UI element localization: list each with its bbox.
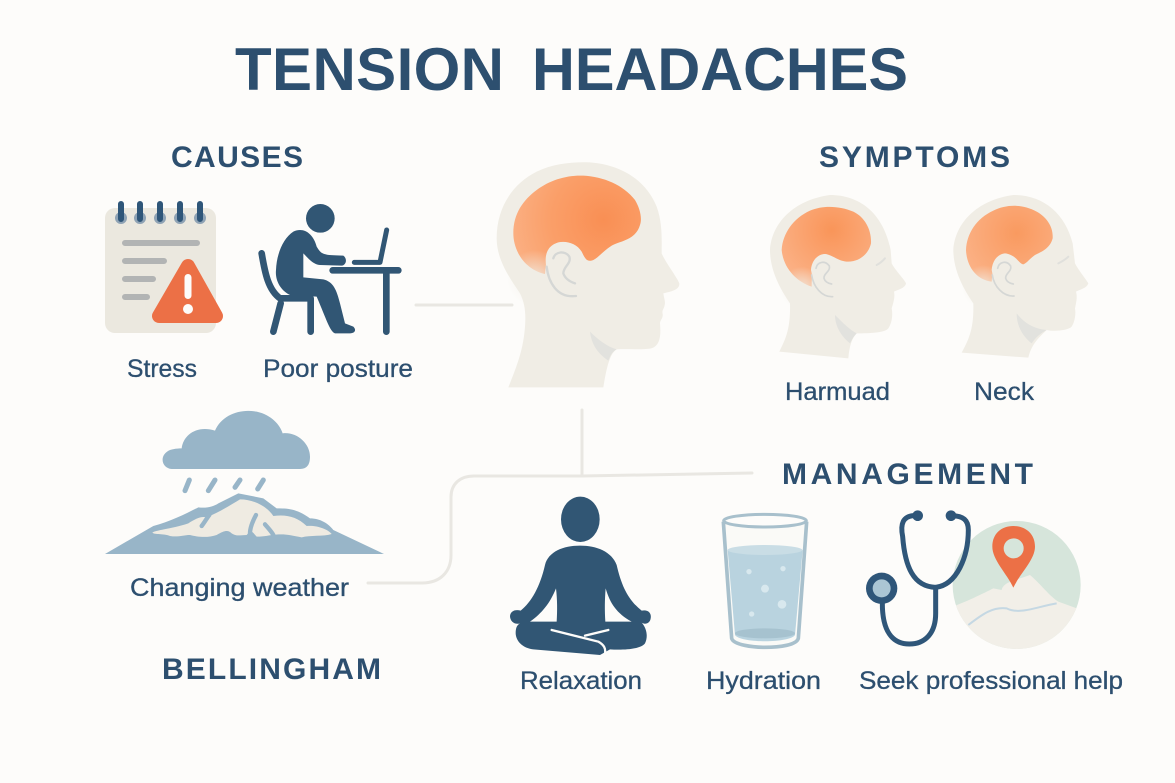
symptom head: neck	[953, 195, 1088, 358]
icon: stress calendar with warning	[105, 204, 216, 333]
title: HEADACHES	[532, 36, 908, 103]
heading: symptoms: SYMPTOMS	[819, 141, 1010, 174]
central head illustration	[497, 162, 679, 387]
connector lines	[368, 305, 752, 583]
symptom head: harmuad	[770, 195, 906, 358]
label: seek professional help: Seek professional help	[859, 667, 1123, 695]
label: relaxation: Relaxation	[520, 667, 642, 695]
icon: stethoscope and map pin	[866, 510, 1083, 653]
label: changing weather: Changing weather	[130, 574, 349, 602]
title: TENSION	[235, 36, 504, 103]
icon: glass of water	[723, 514, 807, 647]
label: stress: Stress	[127, 355, 197, 383]
location label: bellingham: BELLINGHAM	[162, 653, 381, 686]
icon: meditating person	[510, 497, 651, 655]
heading: management: MANAGEMENT	[782, 458, 1033, 491]
icon: poor posture at desk	[262, 204, 398, 333]
label: hydration: Hydration	[706, 667, 821, 695]
label: neck: Neck	[974, 378, 1035, 406]
icon: rain cloud over mountain	[105, 411, 384, 554]
heading: causes: CAUSES	[171, 141, 303, 174]
label: harmuad: Harmuad	[785, 378, 890, 406]
label: poor posture: Poor posture	[263, 355, 413, 383]
